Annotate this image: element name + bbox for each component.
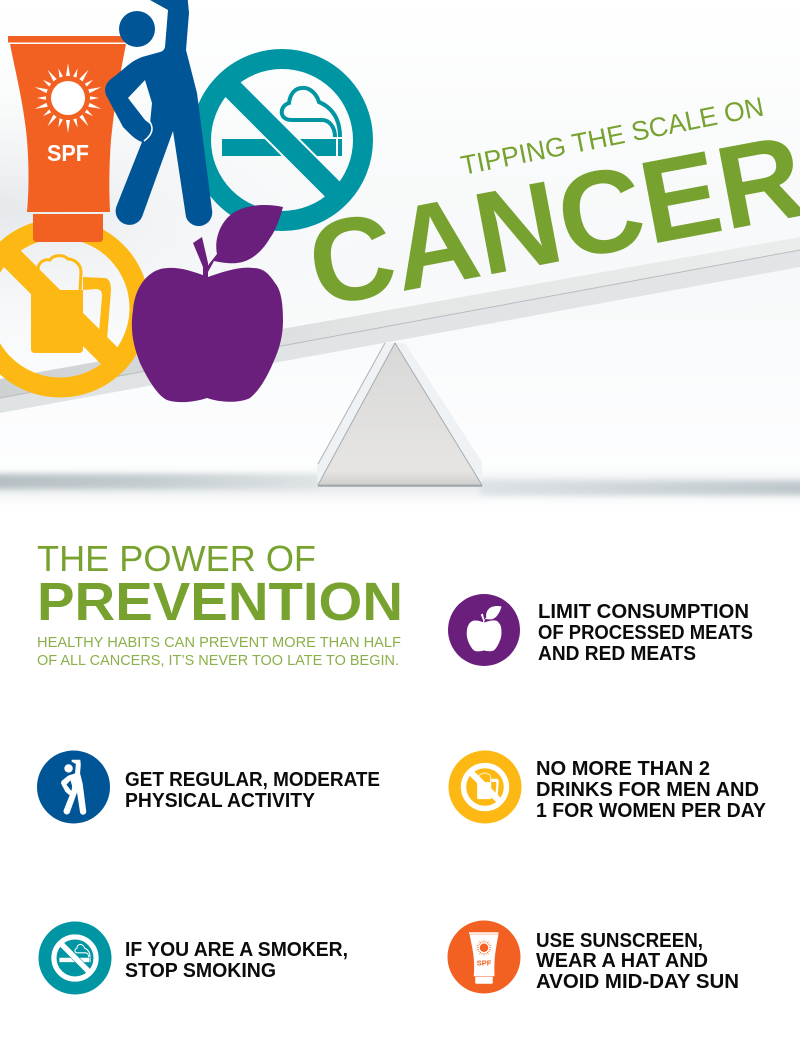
text: sun protection: AVOID MID-DAY SUN	[536, 971, 739, 993]
icon: large sunscreen tube: SPF	[47, 140, 89, 166]
text: stop smoking: IF YOU ARE A SMOKER,	[125, 939, 348, 961]
text: drink limits: NO MORE THAN 2	[536, 758, 710, 780]
icon: blue activity badge	[37, 750, 110, 824]
seesaw triangle fulcrum	[317, 343, 482, 486]
text: physical activity: PHYSICAL ACTIVITY	[125, 790, 316, 812]
floor shadow	[0, 474, 800, 495]
text: limit processed meats: AND RED MEATS	[538, 643, 696, 665]
intro text	[37, 634, 401, 669]
icon: purple apple badge	[448, 594, 520, 666]
icon: teal no smoking badge	[38, 922, 112, 994]
heading: prevention: PREVENTION	[37, 572, 403, 632]
text: sun protection	[536, 930, 739, 993]
intro text: OF ALL CANCERS, IT’S NEVER TOO LATE TO BEGIN.	[37, 652, 399, 669]
icon: orange sunscreen badge: SPF	[477, 958, 492, 967]
icon: large no alcohol sign	[0, 228, 140, 388]
icon: large apple	[132, 205, 283, 402]
text: stop smoking: STOP SMOKING	[125, 960, 276, 982]
intro text: HEALTHY HABITS CAN PREVENT MORE THAN HALF	[37, 634, 401, 651]
icon: large sunscreen tube	[8, 36, 126, 242]
icon: large exercising person	[105, 0, 212, 226]
seesaw beam	[0, 237, 800, 413]
text: limit processed meats: LIMIT CONSUMPTION	[538, 601, 749, 623]
text: physical activity	[125, 769, 380, 812]
icon: yellow no alcohol badge	[448, 750, 522, 824]
text: drink limits: 1 FOR WOMEN PER DAY	[536, 800, 767, 822]
text: physical activity: GET REGULAR, MODERATE	[125, 769, 380, 791]
icon: orange sunscreen badge	[448, 920, 520, 994]
title: tipping the scale on: TIPPING THE SCALE ON	[458, 92, 766, 181]
text: sun protection: WEAR A HAT AND	[536, 950, 708, 972]
heading: the power of: THE POWER OF	[37, 538, 316, 579]
text: sun protection: USE SUNSCREEN,	[536, 930, 703, 952]
icon: large no smoking sign	[201, 59, 363, 221]
text: limit processed meats	[538, 601, 753, 665]
text: drink limits: DRINKS FOR MEN AND	[536, 779, 759, 801]
text: stop smoking	[125, 939, 348, 982]
text: drink limits	[536, 758, 767, 822]
text: limit processed meats: OF PROCESSED MEATS	[538, 622, 753, 644]
